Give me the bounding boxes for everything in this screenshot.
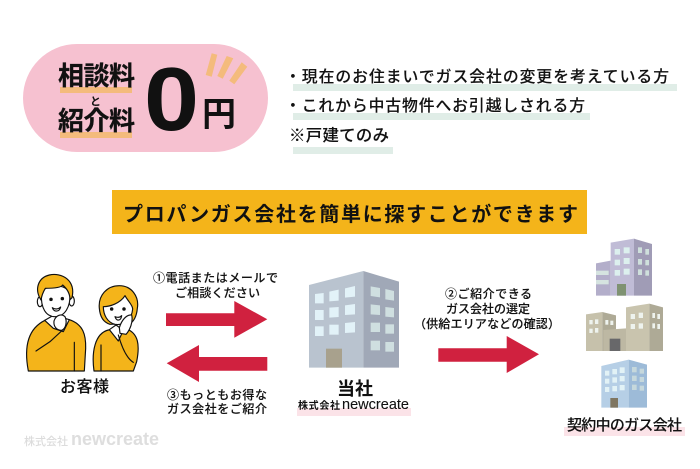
- arrow: customer to company: [166, 301, 267, 338]
- company name: [297, 379, 411, 416]
- step 1 label: ご相談ください: [175, 285, 260, 300]
- step 1 label: [153, 271, 278, 300]
- icon: emphasis rays: [206, 53, 247, 84]
- icon: our company building: [309, 271, 399, 368]
- building: purple: [596, 239, 652, 296]
- badge background pill: [23, 44, 268, 152]
- building: blue: [601, 360, 647, 408]
- bullet line 2: ・これから中古物件へお引越しされる方: [285, 97, 585, 115]
- bullet line 1: ・現在のお住まいでガス会社の変更を考えている方: [285, 68, 669, 86]
- icon: customers couple: [27, 274, 138, 371]
- text block: target customers: [285, 68, 677, 154]
- arrow: company to gas companies: [438, 336, 539, 373]
- building: beige: [586, 304, 663, 351]
- step 3 label: [167, 387, 267, 416]
- step 2 label: [414, 286, 560, 331]
- man: [27, 274, 86, 371]
- label: referral fee: 紹介料: [58, 106, 135, 136]
- note line: ※戸建てのみ: [289, 127, 389, 145]
- label underlines: [60, 87, 132, 138]
- step 3 label: ガス会社をご紹介: [167, 401, 267, 416]
- step 2 label: ②ご紹介できる: [445, 286, 532, 301]
- zero price: 0: [144, 49, 199, 150]
- yen label: 円: [202, 96, 236, 134]
- step 1 label: ①電話またはメールで: [153, 271, 278, 285]
- watermark logo: newcreate: [71, 429, 159, 449]
- contracted gas companies label: 契約中のガス会社: [567, 417, 682, 434]
- company name: 当社: [337, 379, 373, 399]
- panel: free consultation badge: [23, 44, 268, 152]
- watermark logo: [24, 429, 159, 449]
- step 2 label: ガス会社の選定: [446, 301, 530, 316]
- customers label: お客様: [60, 378, 109, 396]
- label: consultation fee: 相談料: [58, 61, 135, 91]
- heading text: プロパンガス会社を簡単に探すことができます: [123, 202, 578, 226]
- step 3 label: ③もっともお得な: [167, 387, 267, 402]
- watermark logo: 株式会社: [24, 434, 68, 448]
- highlight bars: [293, 84, 677, 154]
- company name: 株式会社: [298, 399, 340, 412]
- heading banner: [112, 190, 587, 234]
- icons: gas company buildings: [586, 239, 663, 408]
- label: and: と: [90, 95, 101, 108]
- company name: newcreate: [342, 397, 409, 413]
- woman: [93, 286, 138, 371]
- step 2 label: （供給エリアなどの確認）: [414, 316, 560, 331]
- arrow: company to customer: [167, 345, 267, 382]
